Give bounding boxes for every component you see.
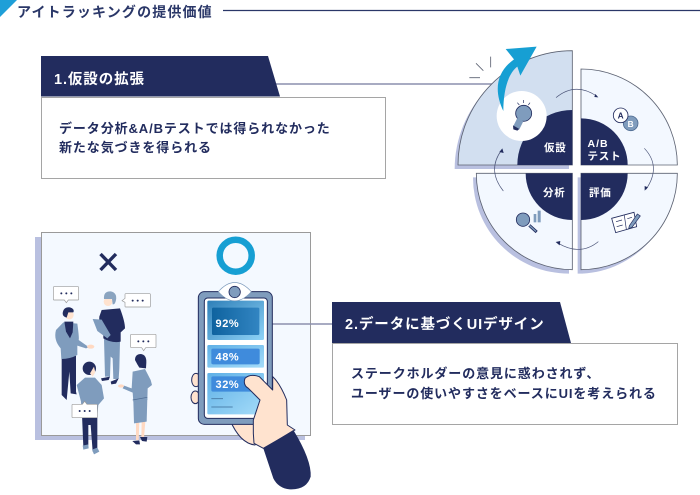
person: woman — [118, 354, 152, 444]
title: アイトラッキングの提供価値 — [17, 4, 213, 20]
cycle label: hypothesis: 仮設 — [544, 142, 567, 154]
panel 1 body text box — [42, 98, 386, 178]
quadrant: analysis — [476, 173, 572, 270]
speech bubble: centre man — [122, 294, 150, 307]
icon: circle mark — [220, 240, 252, 272]
icon: spark lines — [469, 57, 491, 78]
value: 32 percent: 32% — [216, 379, 239, 391]
person: left man — [55, 307, 94, 400]
panel 1 heading: 1.仮設の拡張 — [54, 70, 145, 88]
title — [0, 0, 700, 20]
panel 2 heading: 2.データに基づくUIデザイン — [345, 315, 545, 333]
cycle label: AB test: A/B — [588, 138, 609, 150]
panel 1 body text box: データ分析&A/Bテストでは得られなかった — [59, 121, 331, 136]
person: centre man with clipboard — [93, 291, 125, 384]
panel 2 heading — [332, 302, 571, 343]
value: 48 percent: 48% — [216, 352, 239, 364]
person: bottom man — [77, 362, 104, 454]
quadrant: hypothesis — [458, 51, 572, 165]
arrow: growth — [498, 47, 537, 111]
panel 1 heading — [41, 56, 280, 96]
speech bubble: bottom man — [72, 401, 97, 418]
panel 2 body text box: ユーザーの使いやすさをベースにUIを考えられる — [351, 386, 657, 401]
speech bubble: woman — [131, 334, 156, 351]
cycle label: analysis: 分析 — [543, 186, 566, 199]
hand fingers behind phone — [191, 373, 267, 445]
quadrant: evaluation — [581, 173, 677, 270]
cycle label: evaluation: 評価 — [589, 186, 612, 199]
panel: 2 data based UI design — [332, 302, 678, 424]
icon: magnifier and bars — [516, 211, 541, 232]
value: 92 percent: 92% — [216, 318, 239, 330]
panel: 1 hypothesis expansion — [41, 56, 386, 178]
panel shadow — [35, 237, 305, 440]
icon: A/B badges: A — [618, 110, 624, 120]
connector line: hypothesis — [276, 83, 492, 85]
connector line: data UI — [272, 323, 333, 325]
panel 2 body text box — [332, 344, 678, 424]
icon: notebook and pen — [612, 212, 640, 233]
cycle label: AB test: テスト — [588, 150, 621, 162]
cycle arrows — [495, 89, 653, 249]
phone in hand — [191, 282, 311, 489]
quadrant shadows — [455, 55, 674, 274]
panel background — [42, 232, 310, 436]
icon: white circle with light bulb — [497, 91, 547, 141]
speech bubble: left man — [53, 287, 79, 303]
quadrant: AB test — [581, 69, 677, 165]
cycle diagram — [455, 47, 677, 274]
people discussing — [53, 287, 156, 454]
icon: A/B badges: B — [628, 119, 634, 129]
phone body — [198, 282, 272, 424]
panel 1 body text box: 新たな気づきを得られる — [59, 140, 212, 155]
panel 2 body text box: ステークホルダーの意見に惑わされず、 — [351, 366, 600, 381]
icon: A/B badges — [613, 108, 638, 131]
illustration panel — [35, 232, 310, 440]
cycle label: AB test — [588, 138, 621, 162]
icon: cross mark — [100, 254, 116, 270]
inner navy sectors — [517, 110, 628, 220]
hand and sleeve — [244, 375, 311, 489]
